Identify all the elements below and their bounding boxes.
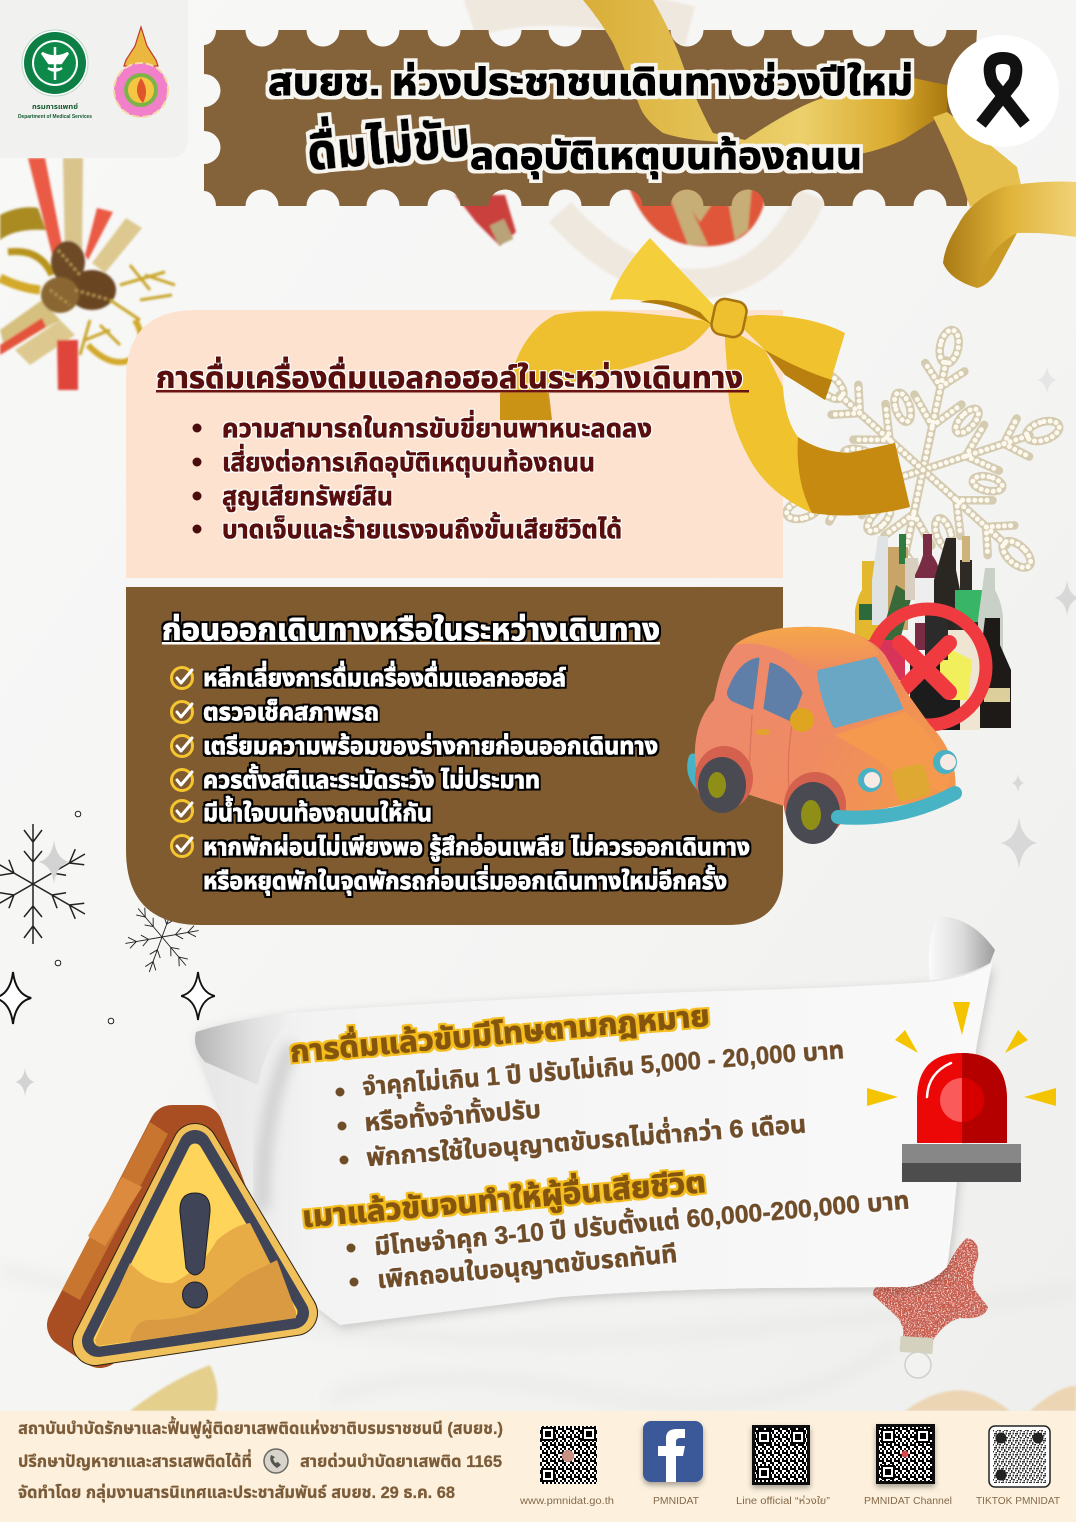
law section: fatal drunk driving <box>300 1161 911 1295</box>
title line 1: สบยช. ห่วงประชาชนเดินทางช่วงปีใหม่ <box>268 62 913 104</box>
title line 2: ลดอุบัติเหตุบนท้องถนน <box>470 136 862 179</box>
triangle face <box>95 1146 295 1343</box>
thin snowflake left <box>0 824 89 944</box>
marble veins <box>0 1270 1076 1405</box>
triangle side <box>70 1128 230 1345</box>
gold snowflake <box>749 300 1076 640</box>
face shading <box>95 1223 295 1346</box>
roof highlight <box>735 627 880 672</box>
qr labels: www.pmnidat.go.th <box>519 1496 614 1507</box>
icon: warning triangle <box>62 1122 296 1346</box>
checklist text: หลีกเลี่ยงการดื่มเครื่องดื่มแอลกอฮอล์ <box>203 661 566 692</box>
paper scroll <box>195 917 995 1325</box>
fatal list: มีโทษจำคุก 3-10 ปี ปรับตั้งแต่ 60,000-200,000 บาท <box>373 1183 911 1262</box>
bullet list: effects: เสี่ยงต่อการเกิดอุบัติเหตุบนท้องถนน <box>222 444 595 478</box>
checklist text: หากพักผ่อนไม่เพียงพอ รู้สึกอ่อนเพลีย ไม่ควรออกเดินทาง <box>203 833 750 862</box>
qr labels: TIKTOK PMNIDAT <box>976 1496 1060 1507</box>
icon: red siren <box>867 1002 1056 1182</box>
pine cone decoration <box>0 158 175 390</box>
car body <box>695 627 956 818</box>
logo: pmnidat <box>114 27 168 117</box>
checklist icons <box>172 668 192 856</box>
bullet list: effects: บาดเจ็บและร้ายแรงจนถึงขั้นเสียชีวิตได้ <box>222 512 622 544</box>
gold ribbon over banner <box>583 0 1076 288</box>
door handle <box>756 729 770 735</box>
fatal list <box>346 1183 911 1295</box>
heading: penalties: การดื่มแล้วขับมีโทษตามกฎหมาย <box>288 994 711 1069</box>
logo: ministry of public health: Department of Medical Services <box>18 114 92 120</box>
qr: tiktok <box>989 1426 1050 1487</box>
exclamation mark <box>180 1193 210 1275</box>
heading: before travelling: ก่อนออกเดินทางหรือในระหว่างเดินทาง <box>162 614 660 647</box>
footer text: สายด่วนบำบัดยาเสพติด 1165 <box>300 1451 502 1471</box>
qr labels: Line official “ห่วงใย” <box>736 1494 830 1507</box>
heading: fatal: เมาแล้วขับจนทำให้ผู้อื่นเสียชีวิต <box>300 1161 707 1235</box>
footer text: สถาบันบำบัดรักษาและฟื้นฟูผู้ติดยาเสพติดแห่งชาติบรมราชชนนี (สบยช.) <box>18 1416 503 1439</box>
checklist text: เตรียมความพร้อมของร่างกายก่อนออกเดินทาง <box>203 732 658 760</box>
cream ribbon behind banner <box>470 6 812 284</box>
logo: ministry of public health: กรมการแพทย์ <box>32 103 78 111</box>
bottles <box>855 534 1011 730</box>
penalties list: จำคุกไม่เกิน 1 ปี ปรับไม่เกิน 5,000 - 20,000 บาท <box>361 1036 845 1102</box>
thin snowflake lower <box>116 890 208 984</box>
qr: website <box>540 1426 597 1484</box>
penalties list: หรือทั้งจำทั้งปรับ <box>363 1092 542 1137</box>
checklist text: หรือหยุดพักในจุดพักรถก่อนเริ่มออกเดินทางใหม่อีกครั้ง <box>203 865 727 896</box>
grill <box>891 762 932 803</box>
penalties list <box>336 1036 845 1173</box>
footer text <box>18 1416 503 1503</box>
fold shading <box>262 1045 292 1210</box>
rear bumper <box>692 758 702 788</box>
icon: phone <box>264 1449 288 1473</box>
qr labels <box>519 1494 1060 1507</box>
panel: before travelling <box>126 587 783 925</box>
red star ornament <box>873 1238 988 1378</box>
fatal list: เพิกถอนใบอนุญาตขับรถทันที <box>376 1240 678 1295</box>
heading: alcohol effects: การดื่มเครื่องดื่มแอลกอฮอล์ในระหว่างเดินทาง <box>156 356 743 395</box>
tan shapes bottom right <box>905 1386 1076 1411</box>
qr labels: PMNIDAT Channel <box>864 1496 952 1507</box>
bullet list: effects: ความสามารถในการขับขี่ยานพาหนะลดลง <box>222 410 652 443</box>
header logos panel <box>0 0 188 158</box>
left roll <box>195 1012 300 1085</box>
icon: orange car <box>692 627 957 844</box>
hood shade <box>835 712 952 792</box>
scroll body <box>196 963 992 1325</box>
headlights <box>858 768 882 792</box>
penalties list: พักการใช้ใบอนุญาตขับรถไม่ต่ำกว่า 6 เดือน <box>365 1106 807 1173</box>
bullet list: effects <box>192 410 652 544</box>
qr: line <box>752 1425 810 1485</box>
icon: facebook <box>643 1421 703 1482</box>
qr: youtube <box>876 1424 935 1484</box>
icon: black mourning ribbon <box>947 35 1059 147</box>
logo: ministry of public health <box>18 30 92 120</box>
bullet list: effects: สูญเสียทรัพย์สิน <box>222 481 393 512</box>
christmas ornaments below banner <box>455 185 768 246</box>
footer text: ปรึกษาปัญหายาและสารเสพติดได้ที่ <box>18 1449 252 1471</box>
windshield <box>819 659 901 726</box>
wheel arches <box>695 746 753 810</box>
panel: alcohol effects <box>126 238 910 578</box>
title banner <box>204 30 977 206</box>
door lines <box>748 715 792 805</box>
footer text: จัดทำโดย กลุ่มงานสารนิเทศและประชาสัมพันธ์ สบยช. 29 ธ.ค. 68 <box>18 1482 455 1503</box>
prohibition sign <box>870 609 986 725</box>
side windows <box>728 659 801 720</box>
checklist text <box>203 661 750 896</box>
gold bell bottom left <box>130 1365 218 1411</box>
right roll <box>929 917 995 980</box>
law section: drunk driving penalties <box>288 994 845 1173</box>
footer band <box>0 1411 1076 1522</box>
mirror <box>790 708 814 732</box>
checklist text: ตรวจเช็คสภาพรถ <box>203 699 379 726</box>
title highlight: drink don't drive: ดื่มไม่ขับ <box>304 104 472 181</box>
icon: alcohol bottles prohibited <box>855 534 1011 730</box>
checklist text: มีน้ำใจบนท้องถนนให้กัน <box>203 796 432 827</box>
qr labels: PMNIDAT <box>653 1496 699 1507</box>
checklist text: ควรตั้งสติและระมัดระวัง ไม่ประมาท <box>203 764 540 794</box>
wheels <box>698 757 746 813</box>
siren rays <box>867 1002 1056 1106</box>
gold bow <box>500 238 910 515</box>
sparkles and stars <box>0 366 1076 1096</box>
front bumper <box>838 793 955 818</box>
